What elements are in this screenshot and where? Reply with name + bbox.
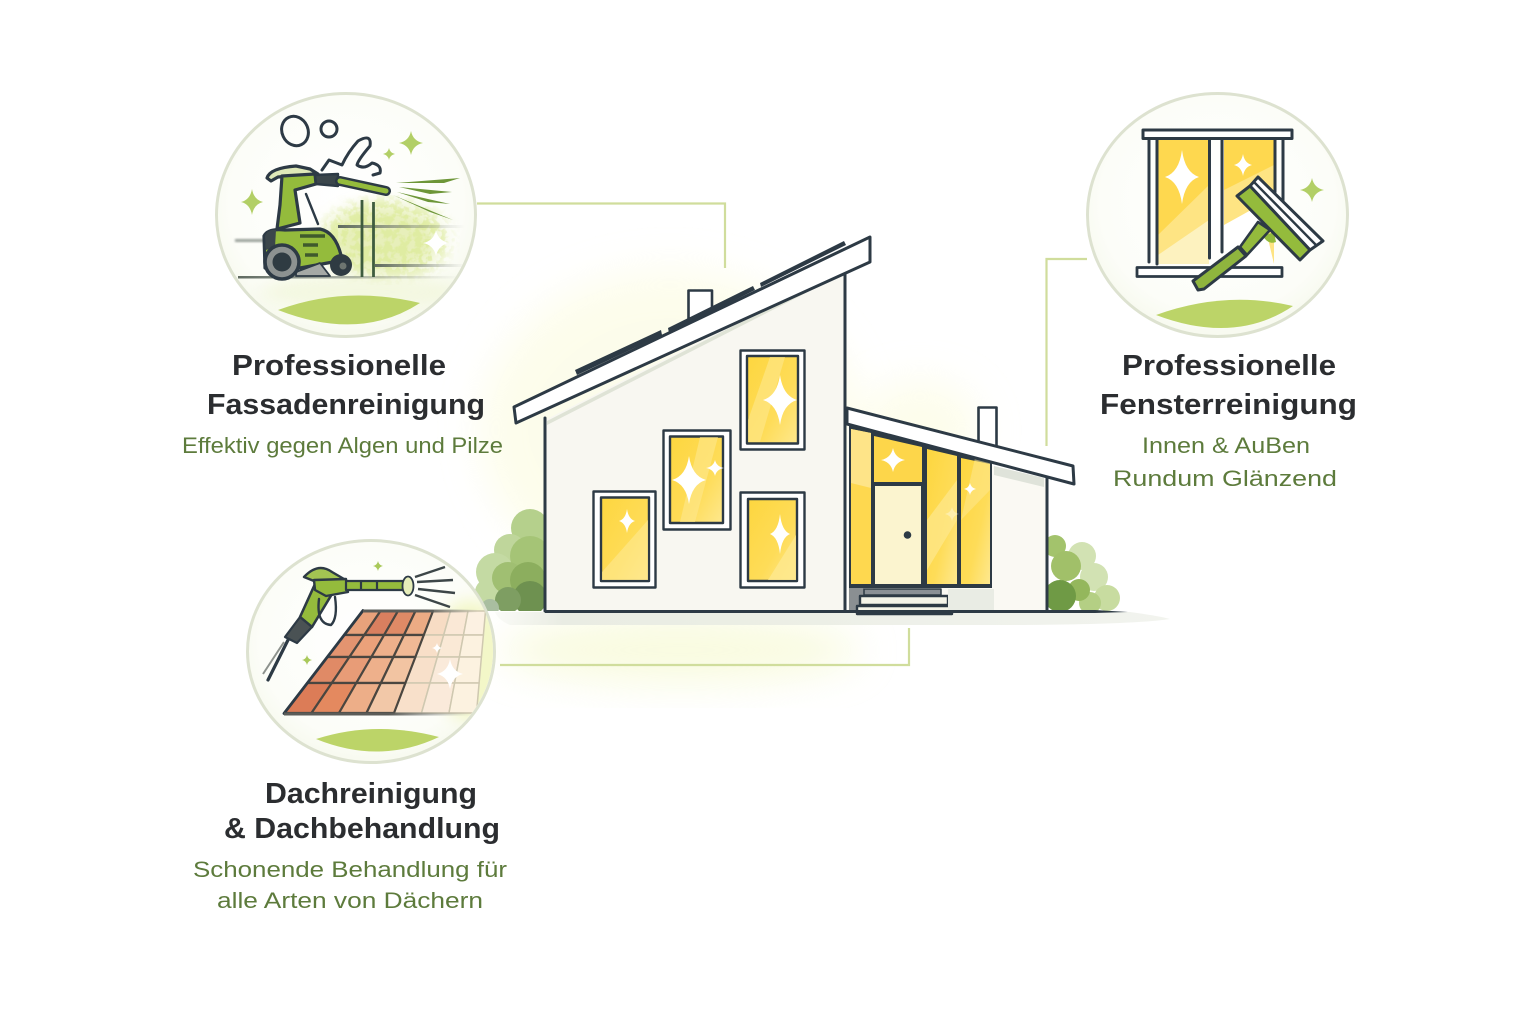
panel: facade cleaning [216, 94, 476, 336]
heading: roof [224, 778, 500, 845]
icon: pressure washer scene [235, 112, 465, 310]
main chimney [688, 290, 712, 318]
text: windows subtitle: Rundum Glänzend [1113, 466, 1337, 491]
window middle [664, 430, 730, 530]
text: windows subtitle: Innen & AuBen [1142, 433, 1310, 458]
icon: window and squeegee [1137, 130, 1324, 290]
solar panels [575, 241, 846, 375]
heading: windows: Professionelle [1122, 350, 1336, 382]
panel: window cleaning [1088, 94, 1348, 336]
background glow behind house [480, 270, 980, 682]
text: roof subtitle: alle Arten von Dächern [217, 888, 483, 913]
annex chimney [978, 408, 996, 448]
clean tiles [394, 611, 486, 713]
text: facade subtitle: Effektiv gegen Algen und Pilze [182, 433, 503, 458]
heading: facade: Fassadenreinigung [207, 389, 485, 421]
badge circle [1088, 94, 1348, 336]
heading: facade [207, 350, 485, 421]
window top [740, 350, 804, 450]
text: windows subtitle [1113, 433, 1337, 491]
spray gun [268, 640, 288, 680]
ground line [545, 610, 1128, 613]
main wall [545, 268, 845, 611]
text: roof subtitle [193, 857, 507, 913]
window lower right [740, 492, 804, 588]
bush left [475, 509, 544, 611]
connector: windows to house [1046, 259, 1087, 446]
house illustration [475, 237, 1170, 625]
icon: roof tiles and spray gun [263, 561, 510, 720]
ground patch [316, 729, 439, 752]
ground patch [1156, 300, 1293, 328]
entrance steps [849, 588, 994, 614]
heading: windows: Fensterreinigung [1100, 389, 1357, 421]
badge circle [248, 540, 494, 762]
main roof [514, 237, 870, 423]
heading: roof: Dachreinigung [265, 778, 477, 810]
text: roof subtitle: Schonende Behandlung für [193, 857, 507, 882]
annex wall [848, 420, 1047, 611]
heading: facade: Professionelle [232, 350, 446, 382]
annex roof [847, 408, 1074, 484]
bush right [1044, 535, 1120, 614]
connector: facade to house [477, 204, 725, 268]
heading: windows [1100, 350, 1357, 421]
window lower left [594, 492, 656, 588]
ground shadow [495, 612, 1170, 625]
ground patch [278, 295, 420, 324]
badge circle [216, 94, 476, 336]
panel: roof cleaning [248, 540, 510, 762]
glazed front [849, 424, 992, 588]
connector: roof to house [500, 628, 909, 665]
heading: roof: & Dachbehandlung [224, 813, 500, 845]
dirty tiles [284, 611, 433, 713]
